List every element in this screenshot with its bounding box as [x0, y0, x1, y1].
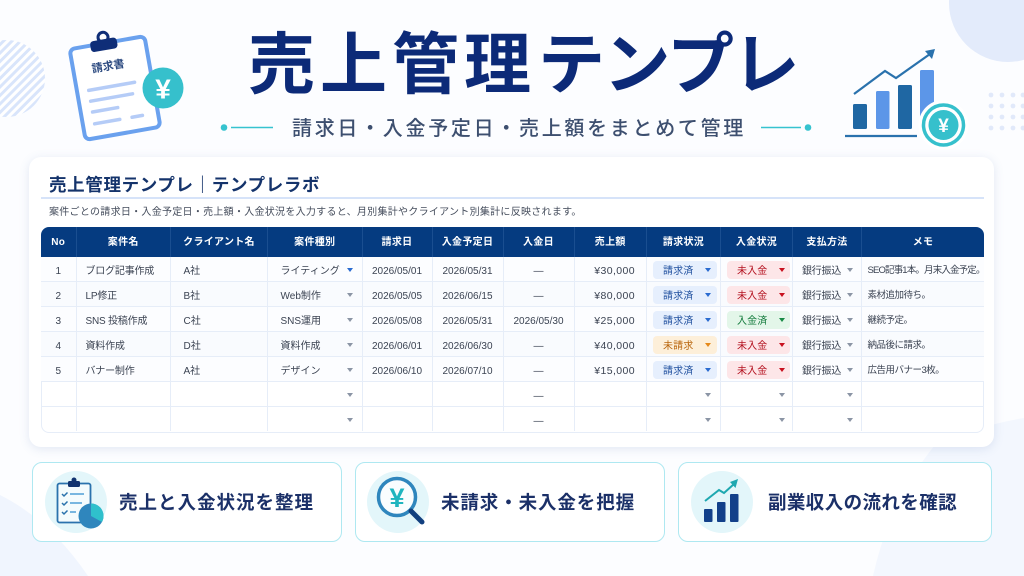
icon: invoice clipboard with yen: ¥ [155, 74, 171, 104]
row 5: A社 [184, 366, 200, 377]
row 4: ¥40,000 [594, 340, 635, 352]
row 5: 2026/06/10 [372, 366, 422, 377]
row 1: 2026/05/01 [372, 266, 422, 277]
row 5: 銀行振込 [802, 366, 841, 377]
heading underline [41, 197, 984, 199]
row 5: — [534, 366, 544, 377]
row 1: ブログ記事作成 [86, 266, 154, 277]
icon: invoice clipboard with yen: 請求書 [91, 56, 126, 76]
subtitle right ornament [761, 124, 812, 131]
row 3: 継続予定。 [868, 315, 913, 326]
row 1: ライティング [280, 266, 340, 277]
row 2: 素材追加待ち。 [868, 290, 931, 301]
row 1: 2026/05/31 [442, 266, 493, 277]
title: 売上管理テンプレ [248, 28, 798, 103]
row 2: 銀行振込 [802, 291, 841, 302]
panel: feature card 2 [355, 462, 665, 542]
icon: growth chart with yen coin: ¥ [938, 116, 949, 137]
row 3: 2026/05/30 [513, 316, 564, 327]
table description: 案件ごとの請求日・入金予定日・売上額・入金状況を入力すると、月別集計やクライアント別集計に反映されます。 [49, 207, 582, 218]
table header row: 請求状況 [663, 237, 704, 248]
row 4 [41, 332, 984, 357]
row 4: 4 [55, 341, 61, 352]
row 5: デザイン [280, 366, 320, 377]
row 1: A社 [184, 266, 200, 277]
empty row 6: — [534, 391, 544, 402]
row 2: 未入金 [737, 290, 767, 302]
row 3: 2026/05/31 [442, 316, 493, 327]
row 1: ¥30,000 [594, 265, 635, 277]
icon: checklist with pie chart [45, 471, 107, 533]
row 1: SEO記事1本。月末入金予定。 [868, 265, 985, 276]
icon: growth chart with yen coin [845, 49, 966, 147]
panel: feature card 3 [678, 462, 992, 542]
table header row: メモ [913, 237, 933, 248]
table header row: 入金状況 [736, 237, 777, 248]
row 2: 請求済 [663, 290, 693, 302]
row 4: 資料作成 [86, 341, 125, 352]
table header row: 入金予定日 [442, 237, 493, 248]
row 2: — [534, 291, 544, 302]
row 3: 2026/05/08 [372, 316, 422, 327]
row 4: D社 [184, 341, 201, 352]
row 3: SNS運用 [280, 316, 321, 327]
card 2 text: 未請求・未入金を把握 [441, 492, 635, 513]
row 2: Web制作 [280, 291, 321, 302]
panel: sales table card [29, 157, 994, 447]
row 1: 請求済 [663, 266, 693, 276]
card 1 text: 売上と入金状況を整理 [119, 492, 314, 513]
table header row: クライアント名 [183, 237, 255, 248]
row 5: 2026/07/10 [442, 366, 493, 377]
row 3: SNS 投稿作成 [86, 316, 147, 327]
row 1: 未入金 [737, 266, 767, 276]
row 4: 2026/06/01 [372, 341, 422, 352]
row 5: 未入金 [737, 366, 767, 376]
row 4: 納品後に請求。 [868, 340, 931, 351]
table header row [41, 227, 984, 257]
icon: rising bars with arrow [691, 471, 753, 533]
empty row 6 [41, 382, 984, 407]
row 2: LP修正 [86, 291, 117, 302]
row 4: 2026/06/30 [442, 341, 493, 352]
row 4: — [534, 341, 544, 352]
icon: invoice clipboard with yen [68, 30, 184, 142]
row 2: ¥80,000 [594, 290, 635, 302]
panel: feature card 1 [32, 462, 342, 542]
table header row: 請求日 [382, 237, 412, 248]
row 3: 3 [55, 316, 61, 327]
row 3: ¥25,000 [594, 315, 635, 327]
row 2: 2026/05/05 [372, 291, 422, 302]
row 3: 請求済 [663, 316, 693, 326]
table body frame [41, 257, 984, 432]
table header row: 案件種別 [294, 237, 335, 248]
empty row 7 [76, 407, 862, 431]
row 5: 広告用バナー3枚。 [868, 365, 944, 376]
row 4: 未入金 [737, 340, 767, 352]
row 5: バナー制作 [86, 366, 134, 377]
row 2 [41, 282, 984, 307]
row 3: C社 [184, 316, 201, 327]
icon: magnifier with yen [367, 471, 429, 533]
row 5 [41, 357, 984, 382]
row 1: 1 [55, 266, 61, 277]
row 5: 5 [55, 366, 61, 377]
row 2: 2 [55, 291, 61, 302]
subtitle: 請求日・入金予定日・売上額をまとめて管理 [292, 118, 746, 140]
subtitle left ornament [220, 124, 273, 131]
row 2: B社 [184, 291, 200, 302]
row 4: 資料作成 [280, 341, 320, 352]
table header row: 支払方法 [806, 237, 848, 248]
table header row: 案件名 [108, 237, 139, 248]
row 2: 2026/06/15 [442, 291, 493, 302]
table header row: 売上額 [595, 237, 626, 248]
row 5: 請求済 [663, 366, 693, 376]
row 1 [41, 257, 984, 282]
row 1: 銀行振込 [802, 266, 841, 277]
row 4: 未請求 [663, 340, 693, 352]
table heading: 売上管理テンプレ｜テンプレラボ [49, 175, 320, 195]
empty row 7: — [534, 416, 544, 427]
table header row: 入金日 [523, 237, 554, 248]
icon: magnifier with yen: ¥ [389, 483, 405, 513]
row 5: ¥15,000 [594, 365, 635, 377]
row 3: 入金済 [737, 316, 767, 326]
row 3: 銀行振込 [802, 316, 841, 327]
row 1: — [534, 266, 544, 277]
row 4: 銀行振込 [802, 341, 841, 352]
table header row: No [51, 237, 65, 248]
row 3 [41, 307, 984, 332]
card 3 text: 副業収入の流れを確認 [768, 492, 957, 513]
